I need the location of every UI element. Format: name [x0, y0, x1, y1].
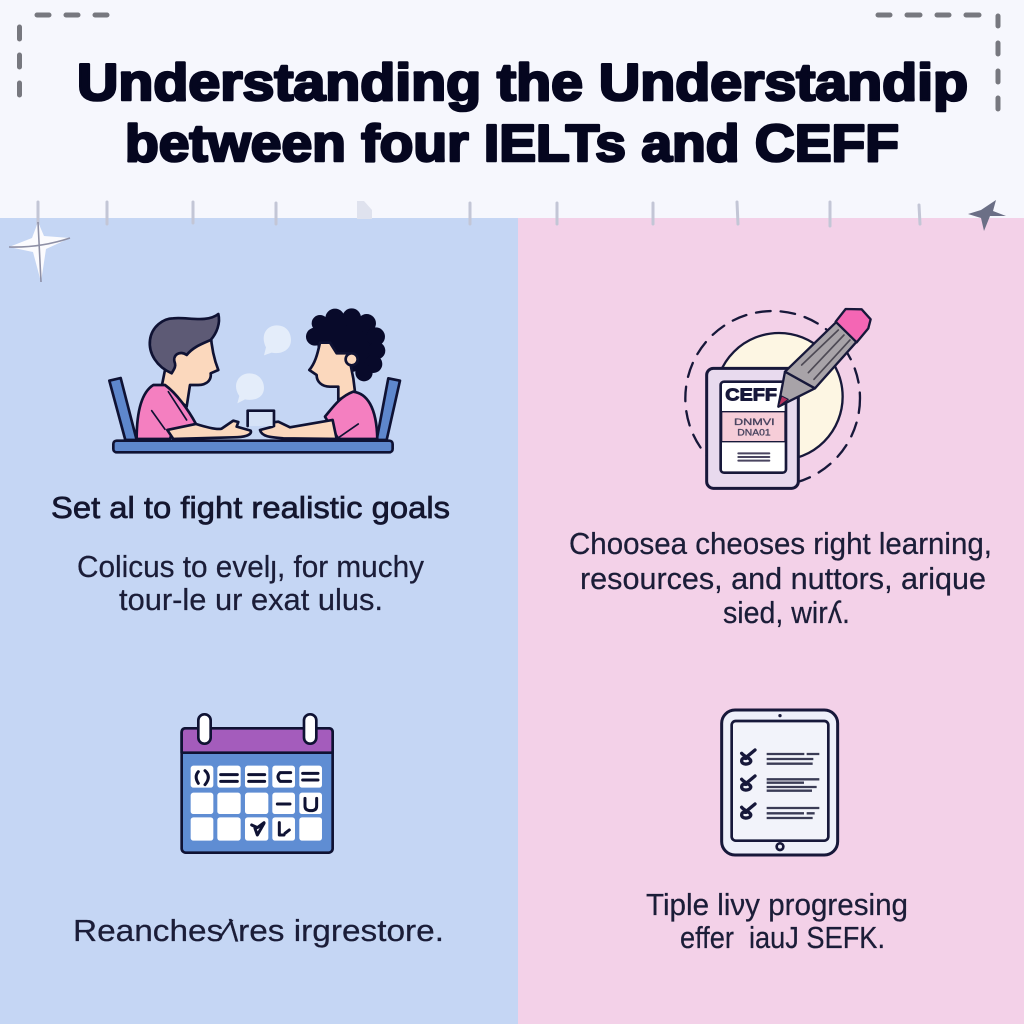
text block: top right: Choosea cheoses right learning,: [569, 526, 992, 561]
tablet sheet: DNA01: [737, 427, 771, 437]
text block: bottom right: effer iauJ SEFK.: [680, 920, 885, 955]
text block: top left: [77, 549, 424, 617]
text block: top right: sied, wirʎ.: [723, 595, 850, 630]
heading: goals: Set al to fight realistic goals: [51, 490, 450, 525]
title: between four IELTs and CEFF: [125, 115, 899, 173]
pencil: [778, 309, 871, 407]
text block: bottom left: Reanches⁄\res irgrestore.: [73, 913, 444, 948]
left chair: [109, 378, 137, 440]
text block: top left: Colicus to evelȷ, for muchy: [77, 549, 424, 584]
speech bubble: lower: [236, 373, 264, 403]
icon: white sparkle: [9, 222, 70, 282]
left person: [137, 314, 251, 439]
text block: bottom right: [646, 887, 908, 955]
icon: two people talking: [109, 308, 400, 452]
tablet sheet: DNMVI: [734, 417, 775, 427]
panel: left blue: [0, 218, 518, 1024]
speech bubble: upper: [264, 325, 291, 355]
cream circle: [715, 333, 843, 460]
right chair: [377, 378, 400, 440]
header band: [0, 0, 1024, 218]
icon: test sheet and pencil: [685, 309, 871, 488]
text block: top left: tour-le ur exat ulus.: [119, 582, 383, 617]
tablet sheet: CEFF: [725, 385, 777, 405]
title: Understanding the Understandip: [77, 54, 968, 112]
panel: right pink: [518, 218, 1024, 1024]
tablet sheet: [707, 368, 798, 488]
text block: top right: [569, 526, 992, 630]
icon: calendar: [182, 714, 333, 853]
icon: dark star: [968, 200, 1006, 231]
cup: [248, 411, 274, 426]
dashed ring: [685, 311, 860, 486]
table: [113, 441, 393, 452]
text block: top right: resources, and nuttors, arique: [580, 561, 986, 596]
title: [77, 54, 968, 173]
text block: bottom right: Tiple liνy progresing: [646, 887, 908, 922]
icon: tablet checklist: [722, 710, 838, 855]
right person: [260, 308, 385, 439]
